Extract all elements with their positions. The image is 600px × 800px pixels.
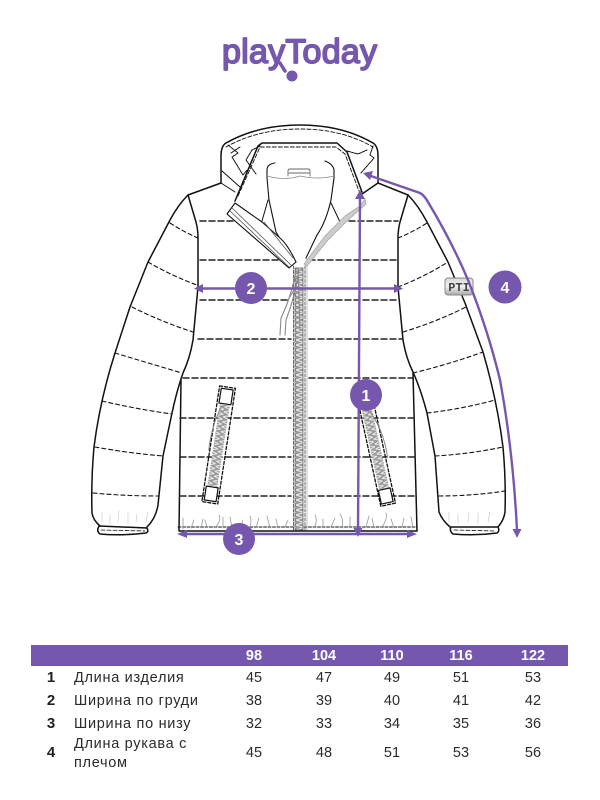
left sleeve xyxy=(92,195,198,535)
logo: playToday: playToday xyxy=(222,33,377,71)
row 4: sleeve length: Длина рукава с xyxy=(74,736,187,752)
shoulders and body outline xyxy=(178,183,417,531)
row 4: sleeve length: 56 xyxy=(525,745,541,761)
measure 2: chest width xyxy=(194,272,403,304)
row 2: chest width: 41 xyxy=(453,693,469,709)
row 3: hem width: Ширина по низу xyxy=(74,716,191,732)
front zipper xyxy=(294,258,307,530)
row 2: chest width: 2 xyxy=(47,692,55,709)
row 4: sleeve length: 53 xyxy=(453,745,469,761)
row 3: hem width xyxy=(47,715,541,732)
measure 4: sleeve length: 4 xyxy=(501,280,510,297)
row 2: chest width: Ширина по груди xyxy=(74,693,199,709)
row 2: chest width: 38 xyxy=(246,693,262,709)
table header row xyxy=(31,645,568,666)
row 4: sleeve length: 4 xyxy=(47,744,55,761)
row 3: hem width: 34 xyxy=(384,716,400,732)
row 1: garment length: 47 xyxy=(316,670,332,686)
row 4: sleeve length: 48 xyxy=(316,745,332,761)
table header row: 110 xyxy=(380,648,404,664)
drawstring xyxy=(280,268,300,335)
right sleeve xyxy=(398,195,505,535)
sleeve badge xyxy=(445,278,473,295)
row 1: garment length: 53 xyxy=(525,670,541,686)
row 1: garment length: 45 xyxy=(246,670,262,686)
measure 3: hem width: 3 xyxy=(235,532,244,549)
row 1: garment length: 51 xyxy=(453,670,469,686)
size table xyxy=(31,645,568,771)
measure 4: sleeve length xyxy=(363,171,522,538)
hood xyxy=(221,125,378,194)
jacket technical drawing xyxy=(92,125,505,535)
row 4: sleeve length xyxy=(47,736,541,771)
measure 1: garment length: 1 xyxy=(362,388,371,405)
row 2: chest width: 42 xyxy=(525,693,541,709)
row 2: chest width xyxy=(47,692,541,709)
measure 1: garment length xyxy=(350,190,382,537)
left pocket xyxy=(201,386,235,504)
collar zipper flap xyxy=(227,199,366,268)
row 4: sleeve length: плечом xyxy=(74,755,128,771)
measure 3: hem width xyxy=(177,523,417,555)
row 3: hem width: 33 xyxy=(316,716,332,732)
table header row: 122 xyxy=(521,648,545,664)
row 3: hem width: 32 xyxy=(246,716,262,732)
right pocket xyxy=(360,405,398,506)
row 2: chest width: 39 xyxy=(316,693,332,709)
row 1: garment length: Длина изделия xyxy=(74,670,184,686)
row 3: hem width: 3 xyxy=(47,715,55,732)
table header row: 116 xyxy=(449,648,473,664)
row 1: garment length xyxy=(47,669,541,686)
hem fur texture xyxy=(183,513,413,529)
row 1: garment length: 49 xyxy=(384,670,400,686)
row 1: garment length: 1 xyxy=(47,669,55,686)
table header row: 104 xyxy=(312,648,336,664)
row 4: sleeve length: 51 xyxy=(384,745,400,761)
measure 2: chest width: 2 xyxy=(247,281,256,298)
collar and neck xyxy=(235,143,362,262)
row 3: hem width: 35 xyxy=(453,716,469,732)
row 4: sleeve length: 45 xyxy=(246,745,262,761)
table header row: 98 xyxy=(246,648,262,664)
sleeve badge: PTI xyxy=(448,281,470,295)
row 2: chest width: 40 xyxy=(384,693,400,709)
quilting lines on body xyxy=(180,221,416,496)
row 3: hem width: 36 xyxy=(525,716,541,732)
